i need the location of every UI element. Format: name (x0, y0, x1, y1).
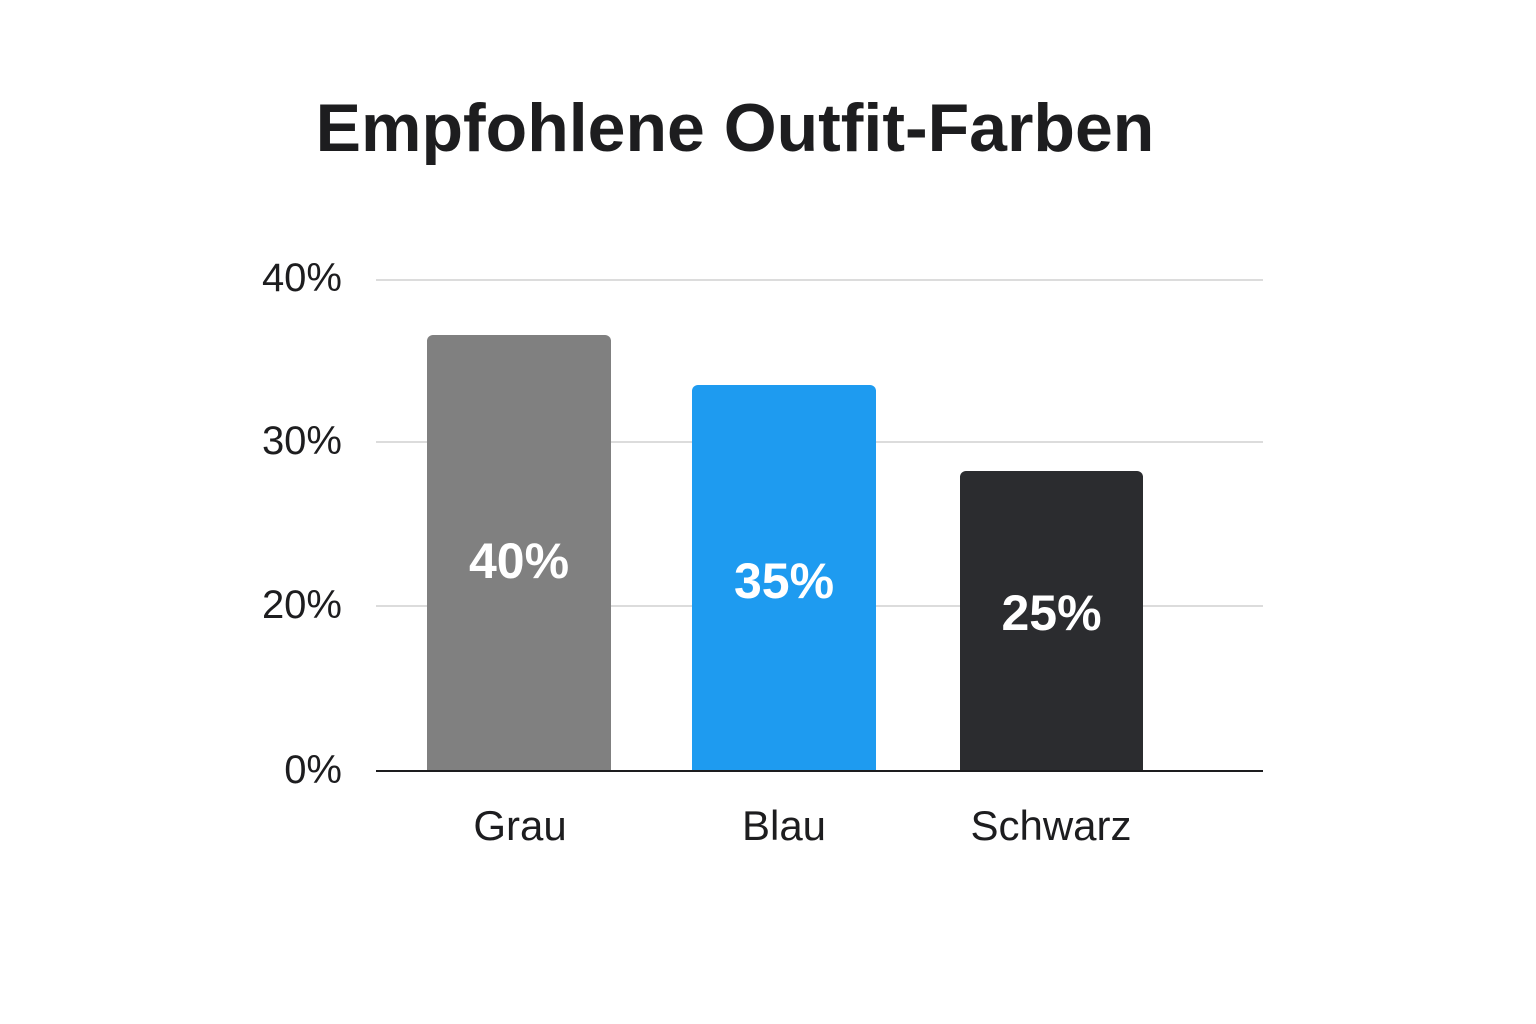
y-axis labels: 20% (262, 583, 342, 627)
y-axis labels: 0% (284, 748, 342, 792)
bar: Schwarz (960, 471, 1143, 771)
x-axis labels: Blau (742, 802, 826, 849)
bar: Grau: 40% (469, 533, 569, 589)
bar: Grau (427, 335, 611, 771)
y-axis labels (262, 256, 342, 792)
x-axis labels (473, 802, 1132, 849)
title: Empfohlene Outfit-Farben (316, 90, 1154, 166)
bar: Blau (692, 385, 876, 771)
x-axis labels: Grau (473, 802, 567, 849)
bar: Blau: 35% (734, 553, 834, 609)
x-axis labels: Schwarz (970, 802, 1132, 849)
bar: Schwarz: 25% (1001, 585, 1102, 641)
y-axis labels: 30% (262, 419, 342, 463)
y-axis labels: 40% (262, 256, 342, 300)
chart (250, 255, 1270, 855)
x axis line (376, 770, 1263, 772)
